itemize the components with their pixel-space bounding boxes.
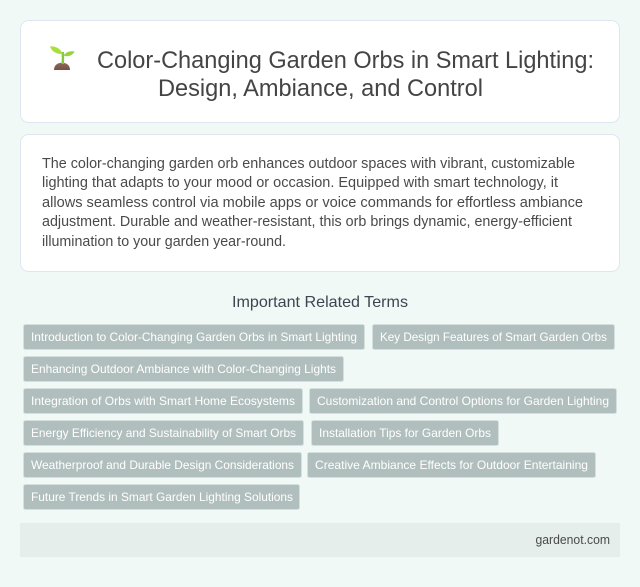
tag: Enhancing Outdoor Ambiance with Color-Changing Lights <box>31 362 336 376</box>
title <box>97 47 594 102</box>
tag: Key Design Features of Smart Garden Orbs <box>380 330 607 344</box>
tag: Creative Ambiance Effects for Outdoor Entertaining <box>315 458 588 472</box>
tag <box>312 420 498 446</box>
tag: Future Trends in Smart Garden Lighting Solutions <box>31 490 293 504</box>
tag <box>24 388 302 414</box>
tag: Customization and Control Options for Garden Lighting <box>317 394 609 408</box>
tag <box>24 452 302 478</box>
tag: Installation Tips for Garden Orbs <box>319 426 491 440</box>
footer: gardenot.com <box>536 533 610 547</box>
title: Color-Changing Garden Orbs in Smart Lighting: <box>97 47 594 74</box>
panel: description: adjustment. Durable and weather-resistant, this orb brings dynamic, energy-efficient <box>42 214 572 230</box>
tag <box>24 356 344 382</box>
tag <box>308 452 596 478</box>
panel: description: The color-changing garden orb enhances outdoor spaces with vibrant, customizable <box>42 156 575 172</box>
icon: sprout <box>50 46 74 70</box>
tag: Introduction to Color-Changing Garden Orbs in Smart Lighting <box>31 330 357 344</box>
tag: Integration of Orbs with Smart Home Ecosystems <box>31 394 295 408</box>
title: Design, Ambiance, and Control <box>158 75 483 102</box>
tag <box>24 420 304 446</box>
tag <box>24 484 300 510</box>
heading: important related terms: Important Related Terms <box>232 294 408 311</box>
panel: description: lighting that adapts to your mood or occasion. Equipped with smart technology, it <box>42 175 558 191</box>
tag <box>24 324 364 350</box>
panel: description: allows seamless control via mobile apps or voice commands for effortless ambiance <box>42 195 583 211</box>
footer <box>20 523 620 557</box>
panel: description: illumination to your garden year-round. <box>42 234 286 250</box>
panel: description <box>20 134 620 272</box>
tag: Weatherproof and Durable Design Considerations <box>31 458 294 472</box>
tag list <box>24 324 616 510</box>
tag <box>310 388 616 414</box>
tag: Energy Efficiency and Sustainability of Smart Orbs <box>31 426 296 440</box>
panel: header <box>20 20 620 122</box>
tag <box>372 324 614 350</box>
